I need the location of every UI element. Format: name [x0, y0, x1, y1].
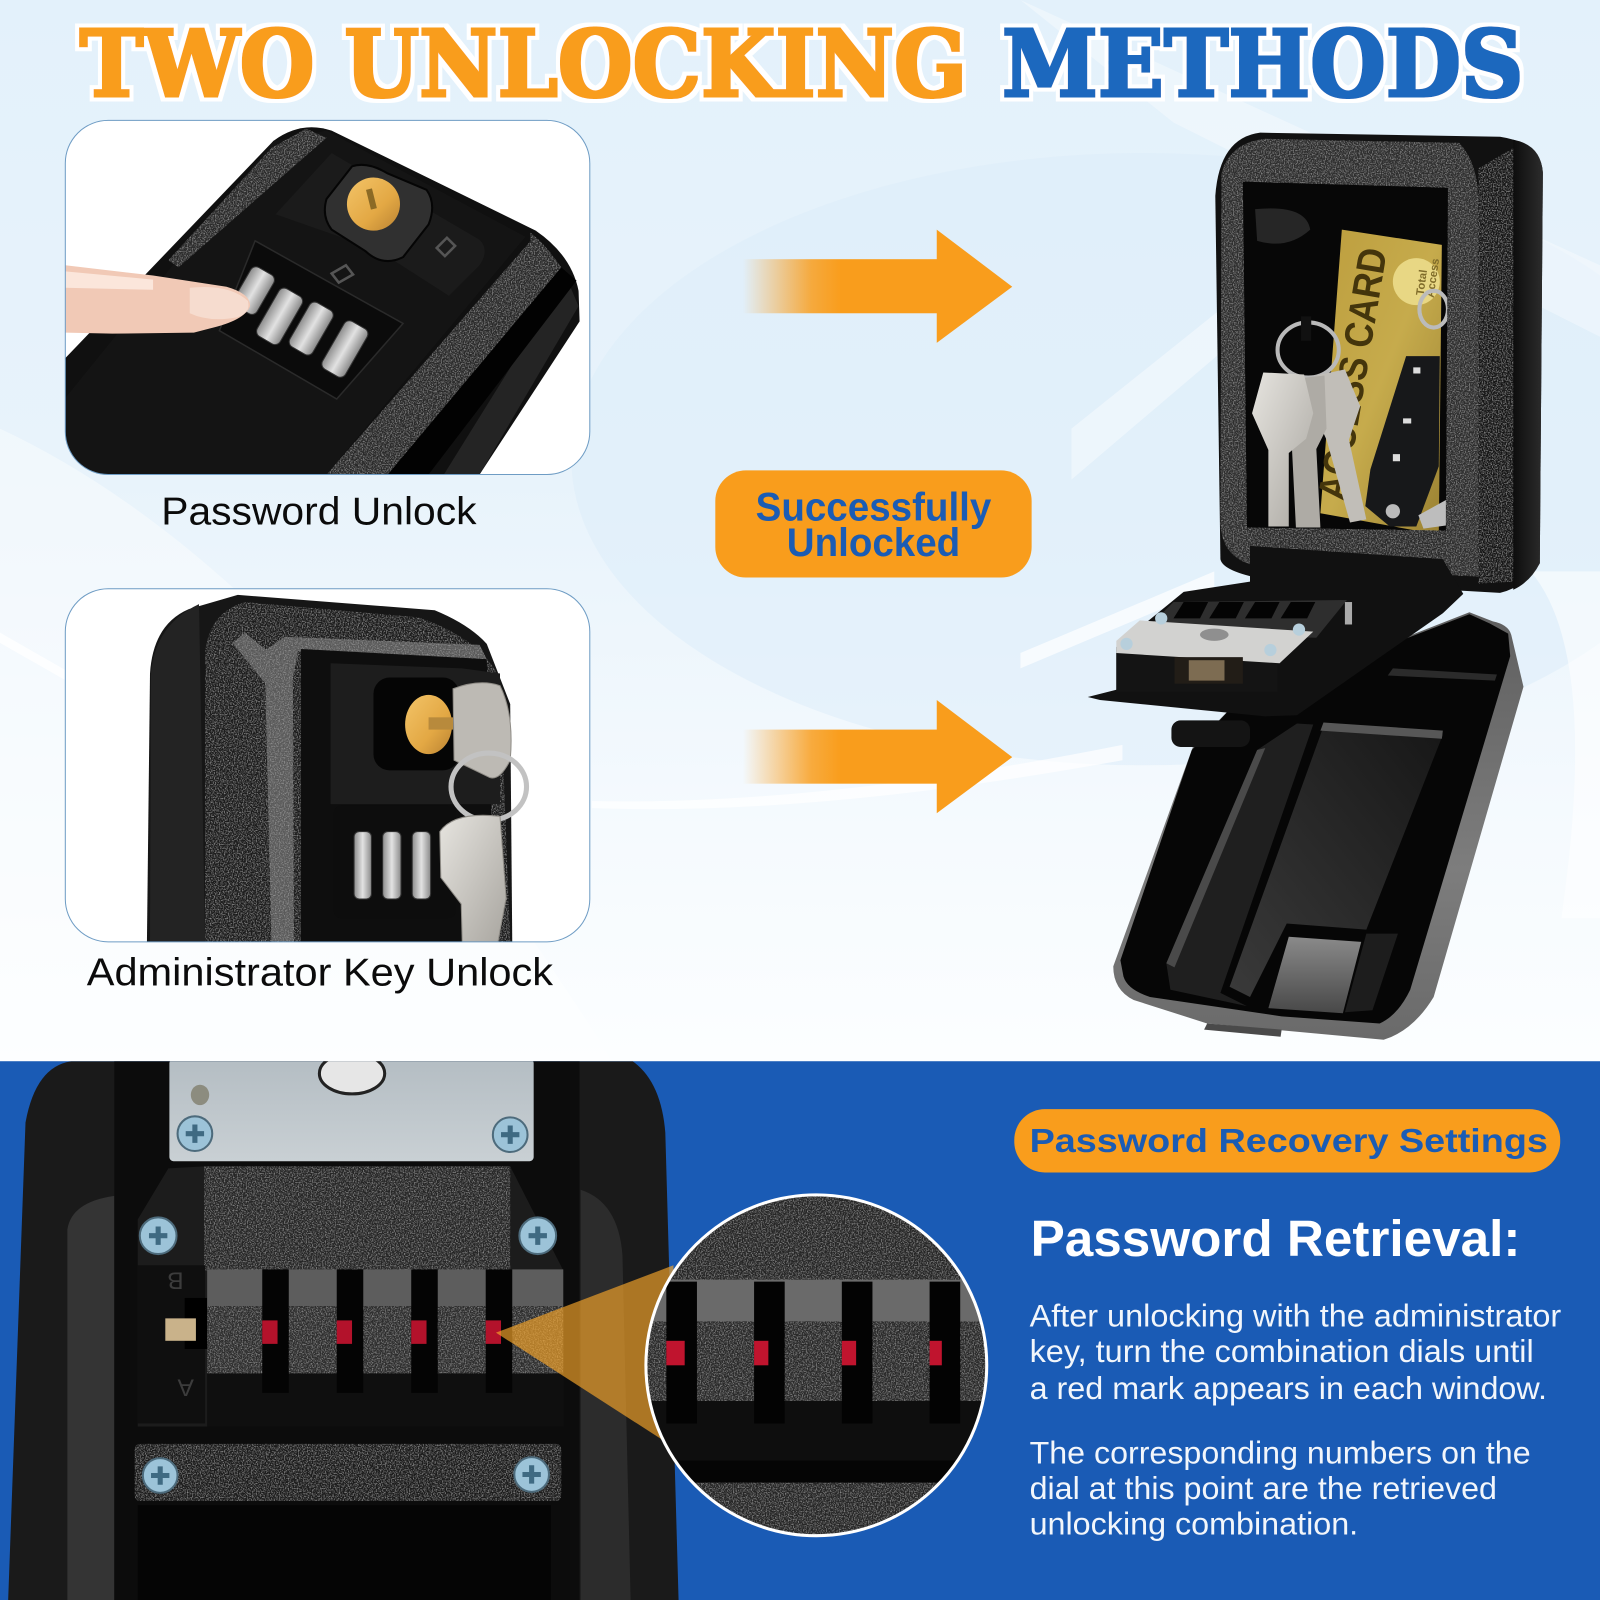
- mechanism block: [138, 1166, 563, 1427]
- text block: step two: dial at this point are the retrieved: [1030, 1470, 1497, 1506]
- latch tab: [1204, 1023, 1282, 1037]
- inner face: [301, 649, 495, 942]
- background: [0, 0, 1600, 1062]
- silver plate: [1116, 620, 1313, 663]
- silver plate: [169, 1059, 534, 1161]
- badge: successfully unlocked: Successfully: [756, 485, 991, 529]
- access card: Access: [1425, 258, 1442, 298]
- lock body, front: [147, 595, 512, 942]
- text block: step two: The corresponding numbers on the: [1030, 1434, 1531, 1470]
- arrow: key to unlocked: [743, 700, 1012, 813]
- finger: [65, 265, 250, 334]
- title part: two unlocking: TWO UNLOCKING: [80, 10, 967, 118]
- dials: [231, 265, 370, 379]
- plate screws: [1155, 612, 1167, 624]
- spring: [1255, 208, 1310, 244]
- screws: [140, 1116, 556, 1493]
- photo: lock interior: [8, 1053, 679, 1600]
- car key fob: [1365, 291, 1448, 529]
- magnifier circle: [643, 1194, 990, 1538]
- heading: password retrieval: Password Retrieval:: [1031, 1210, 1520, 1267]
- center channel: [114, 1061, 580, 1600]
- lower bar: [135, 1444, 561, 1501]
- side wall: [1166, 723, 1313, 1006]
- lower knob: [1171, 720, 1250, 747]
- A/B switch: A: [177, 1374, 194, 1401]
- product: opened lock box: [1088, 133, 1543, 1040]
- key ring and keys: [1252, 316, 1366, 528]
- badge: successfully unlocked: [715, 470, 1032, 578]
- badge: password recovery settings: [1014, 1109, 1560, 1172]
- A/B switch: [138, 1265, 207, 1423]
- upper housing: [1215, 133, 1543, 593]
- interior cavity: [1243, 182, 1448, 531]
- text block: step one: [1030, 1298, 1561, 1406]
- access card: [1310, 230, 1442, 535]
- text block: step two: unlocking combination.: [1030, 1506, 1358, 1542]
- zoom highlight beam: [496, 1265, 673, 1447]
- dial plate: [334, 805, 456, 918]
- panel: administrator key photo: [65, 589, 590, 942]
- access card: Total: [1415, 269, 1430, 296]
- keypad plate: [219, 241, 403, 399]
- key cylinder knob: [325, 165, 432, 261]
- textured front frame: [1220, 139, 1479, 577]
- lid outer shell: [8, 1061, 679, 1600]
- badge: password recovery settings: Password Recovery Settings: [1030, 1123, 1548, 1160]
- badge: successfully unlocked: Unlocked: [787, 521, 960, 565]
- panel: bottom blue band: [0, 1053, 1600, 1600]
- arrow: password to unlocked: [743, 230, 1012, 343]
- A/B switch: B: [167, 1266, 184, 1293]
- dial slots with red marks: [262, 1269, 512, 1393]
- keys: [440, 683, 527, 942]
- tray thumb recess: [1268, 937, 1361, 1013]
- open tray lid: [1113, 612, 1523, 1040]
- dial blocks: [207, 1269, 563, 1427]
- access card: ACCESS CARD: [1310, 245, 1396, 504]
- lower cavity: [138, 1505, 551, 1600]
- text block: step two: [1030, 1434, 1531, 1542]
- label: password unlock: Password Unlock: [161, 490, 477, 533]
- raised centre panel: [1230, 727, 1443, 997]
- key cylinder: [373, 678, 459, 770]
- lid lock mechanism: [1088, 546, 1463, 747]
- label: administrator key unlock: Administrator Key Unlock: [87, 952, 554, 995]
- textured ridge: [233, 633, 488, 942]
- lock body, rotated: [65, 127, 580, 474]
- text block: step one: After unlocking with the administrator: [1030, 1298, 1561, 1334]
- hinge: [1088, 546, 1463, 716]
- title part: methods: METHODS: [1002, 10, 1523, 118]
- lock icons: [332, 238, 455, 283]
- text block: step one: key, turn the combination dials until: [1030, 1333, 1534, 1369]
- text block: step one: a red mark appears in each window.: [1030, 1370, 1547, 1406]
- panel: password unlock photo: [65, 120, 590, 474]
- title: [80, 10, 1523, 118]
